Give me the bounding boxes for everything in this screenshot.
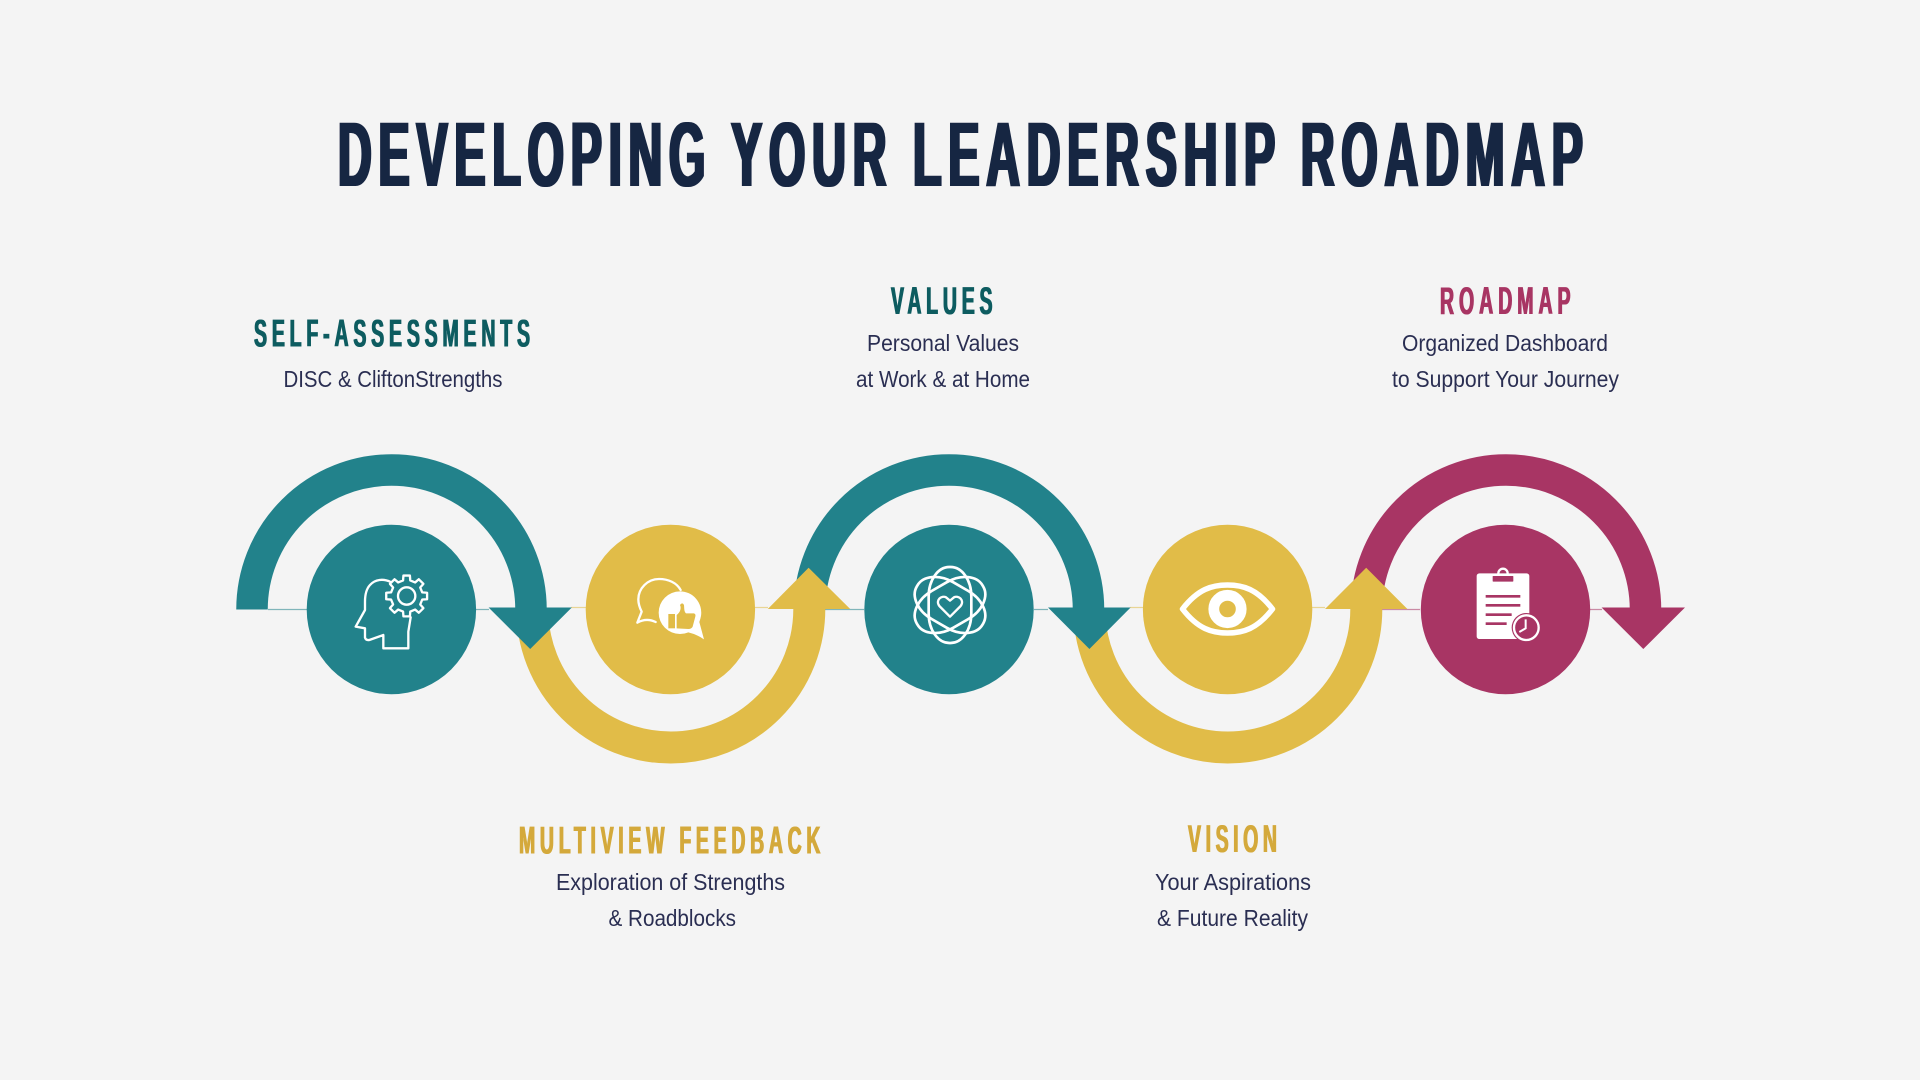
text block: roadmap: Organized Dashboard <box>1402 330 1608 356</box>
arrowhead: teal step 3 <box>1048 608 1131 649</box>
text block: roadmap: ROADMAP <box>1440 279 1570 323</box>
circle: step 5 magenta <box>1421 525 1590 694</box>
text block: self-assessments: SELF-ASSESSMENTS <box>254 311 530 355</box>
text block: self-assessments <box>254 311 530 392</box>
text block: vision: VISION <box>1188 817 1277 861</box>
text block: values: VALUES <box>891 279 992 323</box>
arc: teal step 1 <box>252 470 531 610</box>
circle: step 1 teal <box>307 525 476 694</box>
text block: multiview feedback <box>519 818 820 931</box>
text block: vision: Your Aspirations <box>1155 869 1311 895</box>
text block: roadmap: to Support Your Journey <box>1392 366 1619 392</box>
icon: eye <box>1182 585 1272 633</box>
arc: magenta step 5 <box>1366 470 1646 610</box>
text block: vision: & Future Reality <box>1157 905 1308 931</box>
text block: values: at Work & at Home <box>856 366 1030 392</box>
text block: values <box>856 279 1030 392</box>
text block: multiview feedback: Exploration of Strengths <box>556 869 785 895</box>
icon: head with gear <box>356 576 427 648</box>
icon: speech bubbles with thumbs up <box>637 579 704 639</box>
arc: yellow step 2 <box>532 609 809 748</box>
circle: step 4 yellow <box>1143 525 1312 694</box>
arrowhead: magenta step 5 <box>1602 608 1685 649</box>
text block: vision <box>1155 817 1311 931</box>
thin baseline connector lines <box>268 608 1602 610</box>
text block: multiview feedback: & Roadblocks <box>608 905 736 931</box>
text block: roadmap <box>1392 279 1619 392</box>
title: DEVELOPING YOUR LEADERSHIP ROADMAP <box>338 104 1583 206</box>
arrowhead: teal step 1 <box>489 608 572 649</box>
icon: clipboard with clock <box>1477 569 1541 642</box>
circle: step 3 teal <box>864 525 1034 694</box>
text block: multiview feedback: MULTIVIEW FEEDBACK <box>519 818 820 862</box>
arc: yellow step 4 <box>1089 609 1366 748</box>
circle: step 2 yellow <box>586 525 755 694</box>
text block: values: Personal Values <box>867 330 1019 356</box>
arrowhead: yellow step 2 <box>768 568 850 609</box>
icon: atom with heart <box>906 567 994 643</box>
arc: teal step 3 <box>810 470 1088 610</box>
text block: self-assessments: DISC & CliftonStrengths <box>284 366 502 392</box>
arrowhead: yellow step 4 <box>1325 568 1407 609</box>
